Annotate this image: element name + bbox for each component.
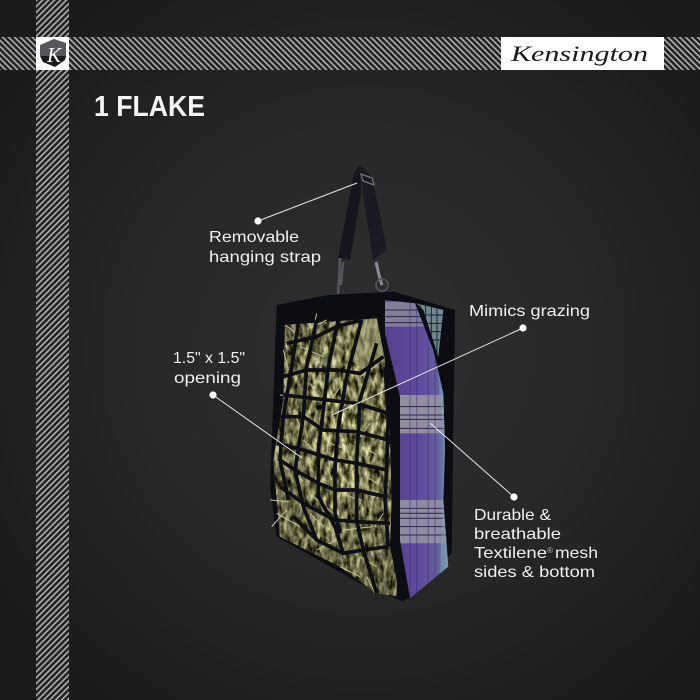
brand logo: Kensington	[501, 37, 664, 70]
callout text: mimics grazing: Mimics grazing	[469, 303, 590, 320]
callout text: opening size: opening	[174, 370, 241, 387]
back plaid panel	[417, 304, 444, 356]
brand logo: Kensington: Kensington	[510, 41, 648, 66]
callout text: removable hanging strap: Removable	[209, 229, 299, 246]
callout text: textilene mesh: mesh	[555, 545, 598, 562]
icon: K shield logo: K	[46, 43, 62, 67]
callout text: textilene mesh: breathable	[474, 526, 561, 543]
callout text: textilene mesh: ®	[547, 546, 553, 555]
callout text: removable hanging strap	[209, 229, 321, 266]
hay bag	[270, 292, 455, 602]
callout line: removable hanging strap	[254, 183, 357, 225]
callout text: opening size: 1.5" x 1.5"	[173, 350, 245, 367]
title: 1 FLAKE	[94, 91, 205, 123]
horizontal striped band	[0, 37, 700, 70]
icon: K shield logo	[36, 37, 69, 70]
callout text: opening size	[173, 350, 245, 387]
black centre binding	[377, 300, 410, 600]
callout text: textilene mesh: Textilene	[474, 545, 547, 562]
hanging strap	[336, 165, 388, 300]
callout text: textilene mesh	[474, 507, 598, 581]
callout text: textilene mesh: sides & bottom	[474, 564, 595, 581]
callout line: mimics grazing	[332, 324, 527, 415]
loose straws	[270, 313, 383, 593]
hay	[270, 317, 397, 600]
callout line: textilene mesh	[430, 423, 518, 501]
callout text: removable hanging strap: hanging strap	[209, 249, 321, 266]
purple plaid side	[383, 300, 450, 600]
callout line: opening size	[209, 391, 302, 458]
vertical striped band	[36, 0, 69, 700]
bag back and black border	[270, 292, 455, 602]
callout text: textilene mesh: Durable &	[474, 507, 552, 524]
black mesh net	[277, 320, 390, 593]
